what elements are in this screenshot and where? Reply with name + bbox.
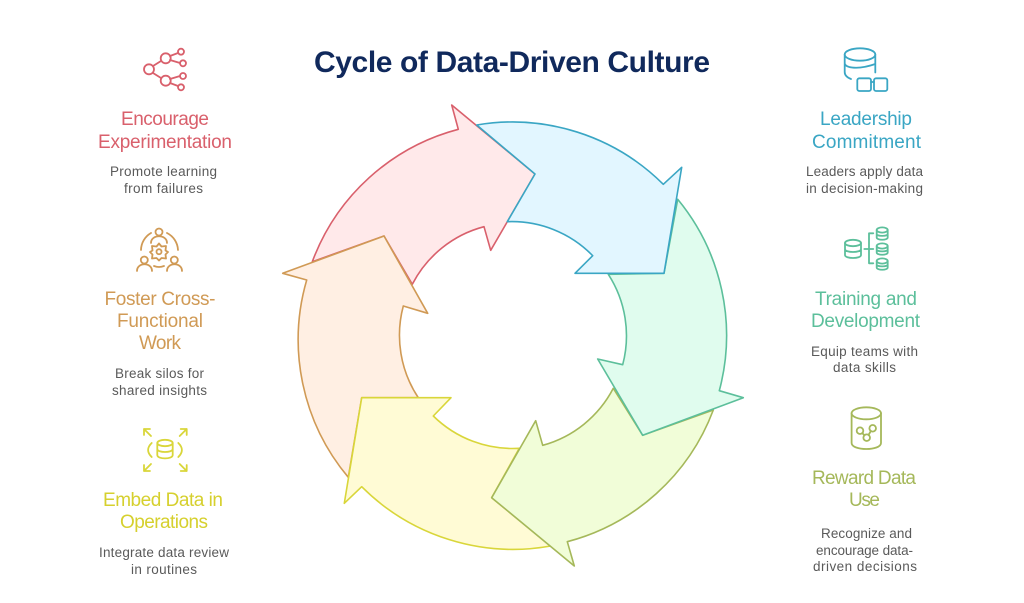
description: from failures [124, 181, 203, 196]
description: in routines [131, 562, 197, 577]
cycle diagram [283, 105, 743, 566]
arrow: embed data in operations [344, 398, 551, 549]
title: Cycle of Data-Driven Culture [314, 46, 710, 79]
heading: Leadership [820, 109, 912, 130]
description: shared insights [112, 383, 207, 398]
heading [104, 289, 216, 354]
description [112, 366, 207, 398]
icon: database with nodes [852, 407, 881, 449]
description [811, 344, 918, 375]
heading [812, 468, 916, 511]
description: in decision-making [806, 181, 923, 196]
description [110, 164, 217, 196]
heading: Development [811, 311, 921, 332]
heading: Work [139, 333, 182, 354]
description [99, 545, 229, 577]
heading: Experimentation [98, 132, 232, 153]
description: Leaders apply data [806, 164, 923, 179]
heading: Commitment [812, 132, 922, 153]
heading: Embed Data in [103, 490, 223, 511]
icon: database with linked boxes [845, 48, 887, 91]
heading: Training and [815, 289, 917, 310]
description: Promote learning [110, 164, 217, 179]
heading [811, 289, 921, 332]
heading: Use [849, 490, 880, 511]
panel: reward data use [812, 407, 917, 574]
icon: team with gear [137, 228, 182, 271]
description: Equip teams with [811, 344, 918, 359]
heading: Encourage [121, 109, 209, 130]
heading [103, 490, 223, 533]
description: Integrate data review [99, 545, 229, 560]
description [813, 526, 917, 574]
arrow: training and development [598, 199, 743, 435]
heading: Reward Data [812, 468, 916, 489]
arrow: reward data use [492, 388, 713, 566]
panel: training and development [811, 227, 921, 375]
description: Break silos for [115, 366, 204, 381]
panel: encourage experimentation [98, 49, 232, 196]
heading [812, 109, 922, 153]
arrow: foster cross-functional work [283, 236, 428, 477]
description: driven decisions [813, 559, 917, 574]
arrow: encourage experimentation [312, 105, 535, 284]
description [806, 164, 923, 196]
icon: database with arrows [144, 429, 187, 471]
panel: embed data in operations [99, 429, 229, 577]
description: encourage data- [816, 543, 913, 558]
heading: Operations [120, 512, 208, 533]
panel: foster cross-functional work [104, 228, 216, 398]
heading [98, 109, 232, 153]
panel: leadership commitment [806, 48, 923, 196]
heading: Foster Cross- [104, 289, 216, 310]
heading: Functional [117, 311, 203, 332]
description: Recognize and [821, 526, 912, 541]
icon: database tree [845, 227, 888, 270]
arrow: leadership commitment [477, 122, 682, 273]
description: data skills [833, 360, 896, 375]
icon: branching network [144, 49, 186, 90]
